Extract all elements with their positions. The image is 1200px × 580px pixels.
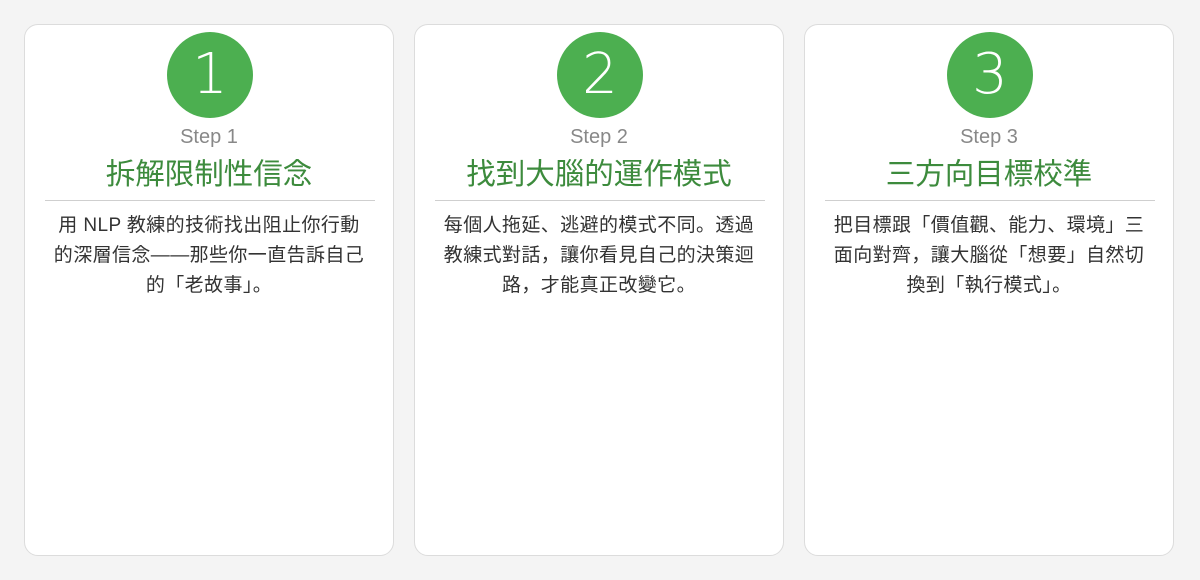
text: step 3 description: 面向對齊，讓大腦從「想要」自然切	[834, 245, 1144, 266]
text: step 2 description: 每個人拖延、逃避的模式不同。透過	[444, 215, 754, 236]
icon: number 2 circle	[557, 32, 643, 118]
panel: step 3	[804, 24, 1174, 556]
text: step 1 description: 的深層信念——那些你一直告訴自己	[54, 245, 364, 266]
icon: number 3 circle	[947, 32, 1033, 118]
text: step 1 description	[54, 215, 364, 296]
panel: step 1	[24, 24, 394, 556]
text: step 3 description: 換到「執行模式」。	[906, 275, 1072, 296]
step label 1: Step 1	[180, 126, 238, 148]
heading: step 1: 拆解限制性信念	[106, 158, 312, 191]
text: step 3 description: 把目標跟「價值觀、能力、環境」三	[834, 215, 1144, 236]
text: step 2 description: 教練式對話，讓你看見自己的決策迴	[444, 245, 754, 266]
text: step 1 description: 的「老故事」。	[146, 275, 272, 296]
text: step 2 description: 路，才能真正改變它。	[502, 275, 696, 296]
heading: step 3: 三方向目標校準	[886, 158, 1092, 191]
panel: step 2	[414, 24, 784, 556]
text: step 3 description	[834, 215, 1144, 296]
step label 2: Step 2	[570, 126, 628, 148]
step label 3: Step 3	[960, 126, 1018, 148]
text: step 2 description	[444, 214, 754, 296]
icon: number 3 circle: 3	[972, 42, 1008, 107]
heading: step 2: 找到大腦的運作模式	[466, 158, 732, 191]
text: step 1 description: 用 NLP 教練的技術找出阻止你行動	[58, 215, 360, 236]
icon: number 1 circle: 1	[192, 42, 228, 107]
icon: number 2 circle: 2	[582, 42, 618, 107]
icon: number 1 circle	[167, 32, 253, 118]
